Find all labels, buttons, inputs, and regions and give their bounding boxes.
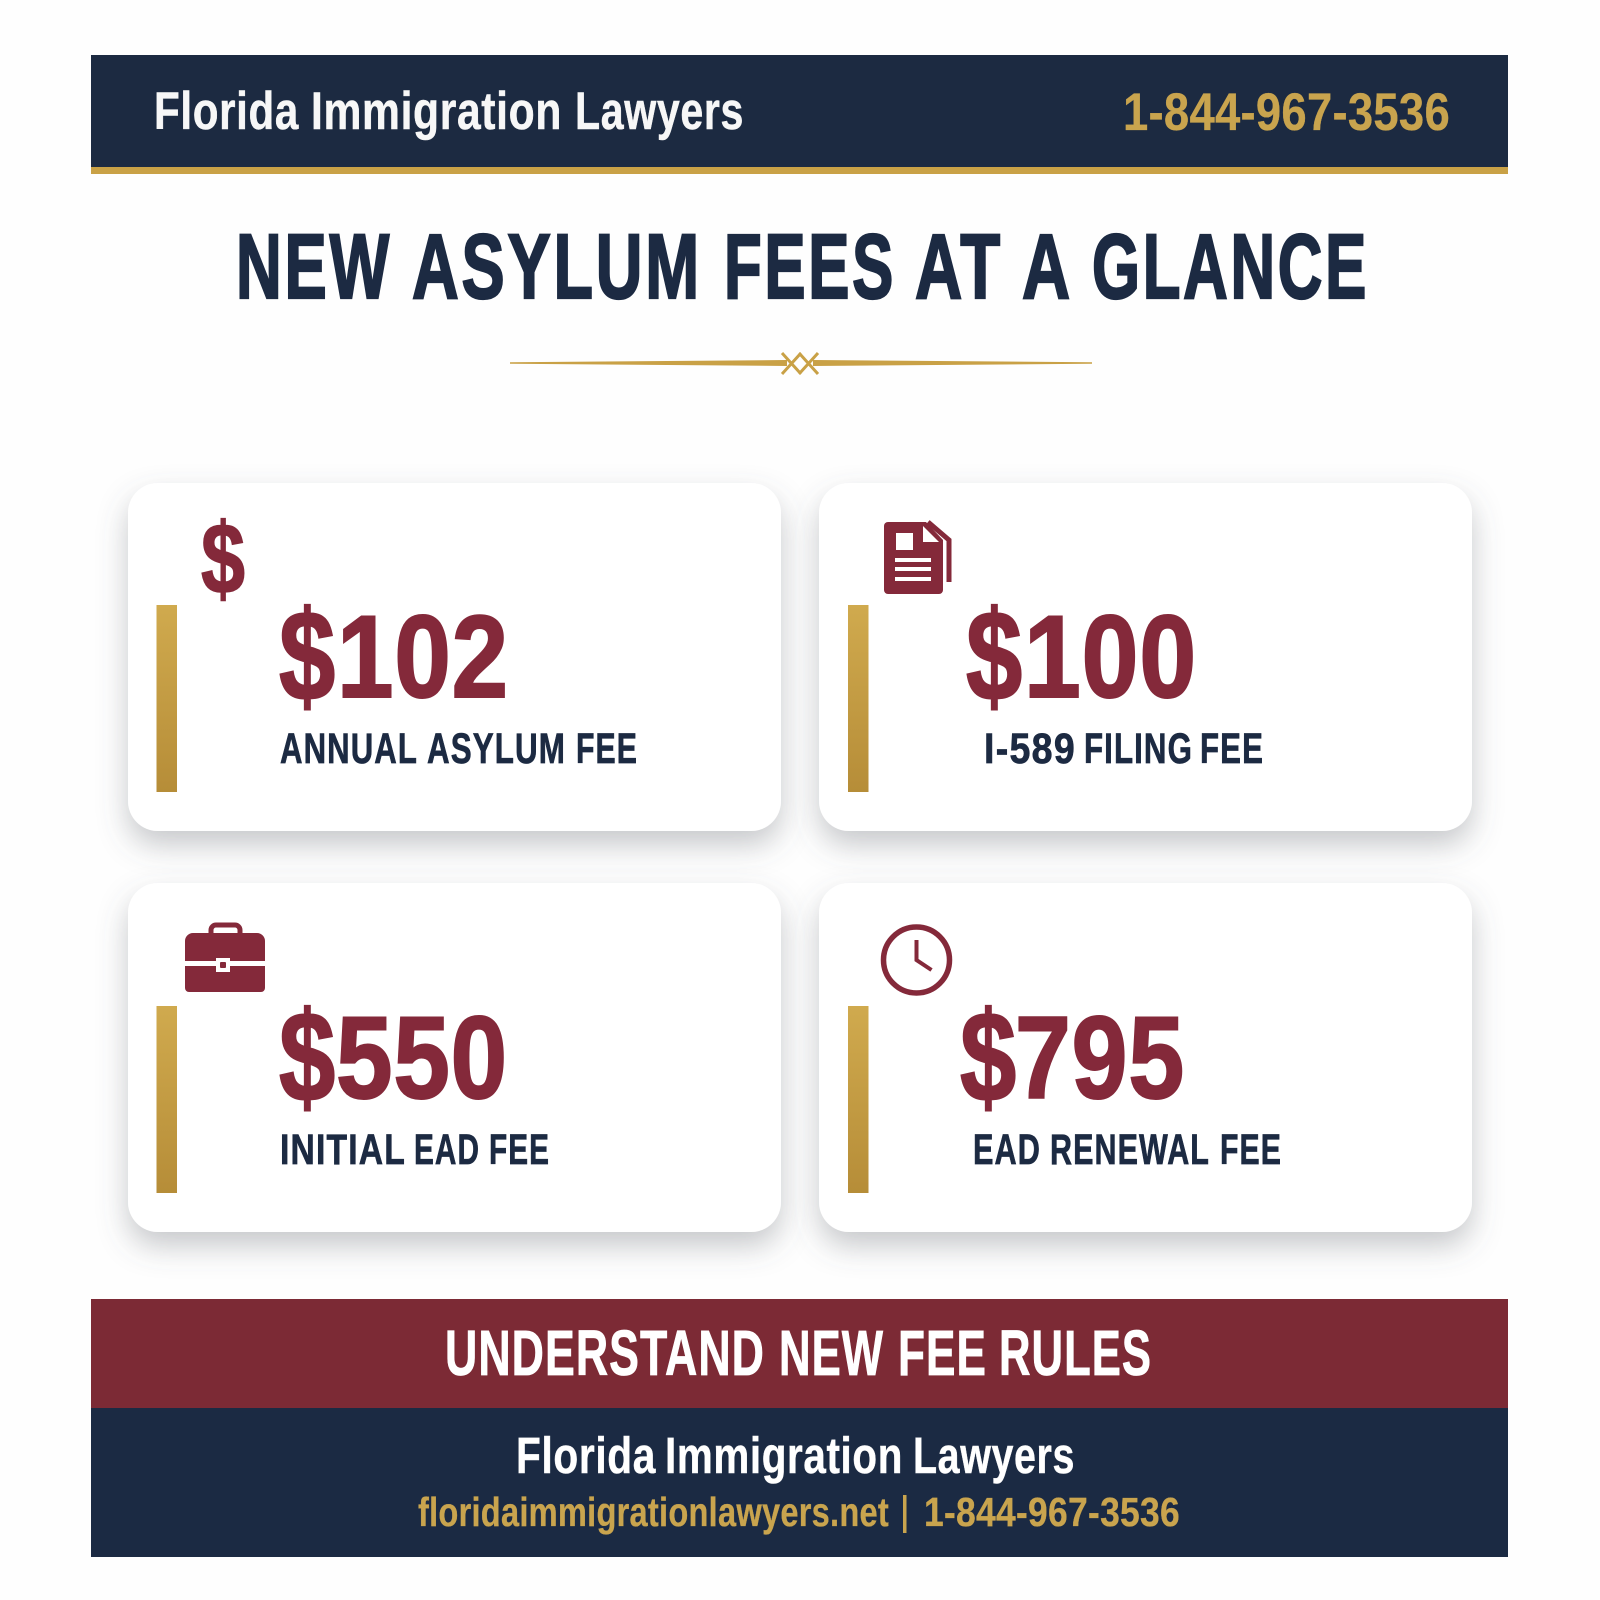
- banner text: NEW: [779, 1317, 884, 1389]
- title: NEW: [236, 216, 392, 318]
- panel: EAD renewal fee: [819, 883, 1472, 1232]
- title: [236, 216, 1369, 318]
- header firm name: [154, 82, 744, 141]
- label: INITIAL: [280, 1126, 406, 1174]
- footer firm name: Immigration: [665, 1427, 903, 1484]
- label: FEE: [576, 725, 638, 773]
- footer contact panel: [91, 1408, 1508, 1557]
- panel: annual asylum fee: [128, 483, 781, 831]
- amount: [279, 585, 509, 728]
- title: AT: [915, 216, 1003, 318]
- label: ANNUAL: [280, 725, 418, 773]
- header firm name: Immigration: [311, 82, 562, 141]
- amount: 102: [337, 591, 509, 722]
- label: [984, 725, 1264, 773]
- amount: $: [279, 585, 336, 728]
- footer website and phone: floridaimmigrationlawyers.net: [418, 1489, 889, 1535]
- amount: 795: [1015, 992, 1185, 1123]
- icon: clock: [884, 927, 950, 993]
- title: FEES: [724, 216, 896, 318]
- title: ASYLUM: [412, 216, 702, 318]
- amount: [960, 986, 1185, 1129]
- label: FEE: [1220, 1126, 1282, 1174]
- label: [280, 725, 638, 773]
- amount: $: [960, 986, 1017, 1129]
- accent bar: [156, 1006, 177, 1193]
- header phone number: 1-844-967-3536: [1123, 83, 1450, 142]
- banner text: RULES: [999, 1317, 1152, 1389]
- banner text: [445, 1317, 1152, 1389]
- label: ASYLUM: [427, 725, 566, 773]
- footer firm name: Florida: [516, 1427, 656, 1484]
- banner text: FEE: [898, 1317, 987, 1389]
- banner text: UNDERSTAND: [445, 1317, 765, 1389]
- header bar: [91, 55, 1508, 174]
- accent bar: [848, 605, 868, 792]
- footer website and phone: 1-844-967-3536: [924, 1489, 1180, 1535]
- icon: briefcase: [185, 925, 265, 992]
- amount: [279, 986, 508, 1129]
- title: A: [1022, 216, 1073, 318]
- amount: [966, 585, 1197, 728]
- header firm name: Lawyers: [575, 82, 744, 141]
- label: EAD: [973, 1126, 1041, 1174]
- label: EAD: [414, 1126, 480, 1174]
- label: FEE: [489, 1126, 550, 1174]
- label: FILING: [1084, 725, 1193, 773]
- amount: 550: [336, 992, 508, 1123]
- title: GLANCE: [1092, 216, 1369, 318]
- icon: dollar sign: $: [201, 503, 245, 615]
- amount: 100: [1024, 591, 1197, 722]
- panel: initial EAD fee: [128, 883, 781, 1232]
- label: FEE: [1200, 725, 1264, 773]
- amount: $: [279, 986, 336, 1129]
- label: I-589: [984, 725, 1076, 773]
- header firm name: Florida: [154, 82, 299, 141]
- ornamental divider: [510, 353, 1092, 374]
- footer firm name: [516, 1427, 1075, 1484]
- panel: I-589 filing fee: [819, 483, 1472, 831]
- amount: $: [966, 585, 1023, 728]
- label: RENEWAL: [1050, 1126, 1210, 1174]
- icon: document: [884, 522, 949, 594]
- label: [280, 1126, 550, 1174]
- footer firm name: Lawyers: [913, 1427, 1075, 1484]
- accent bar: [848, 1006, 868, 1193]
- call-to-action banner: [91, 1299, 1508, 1408]
- accent bar: [156, 605, 177, 792]
